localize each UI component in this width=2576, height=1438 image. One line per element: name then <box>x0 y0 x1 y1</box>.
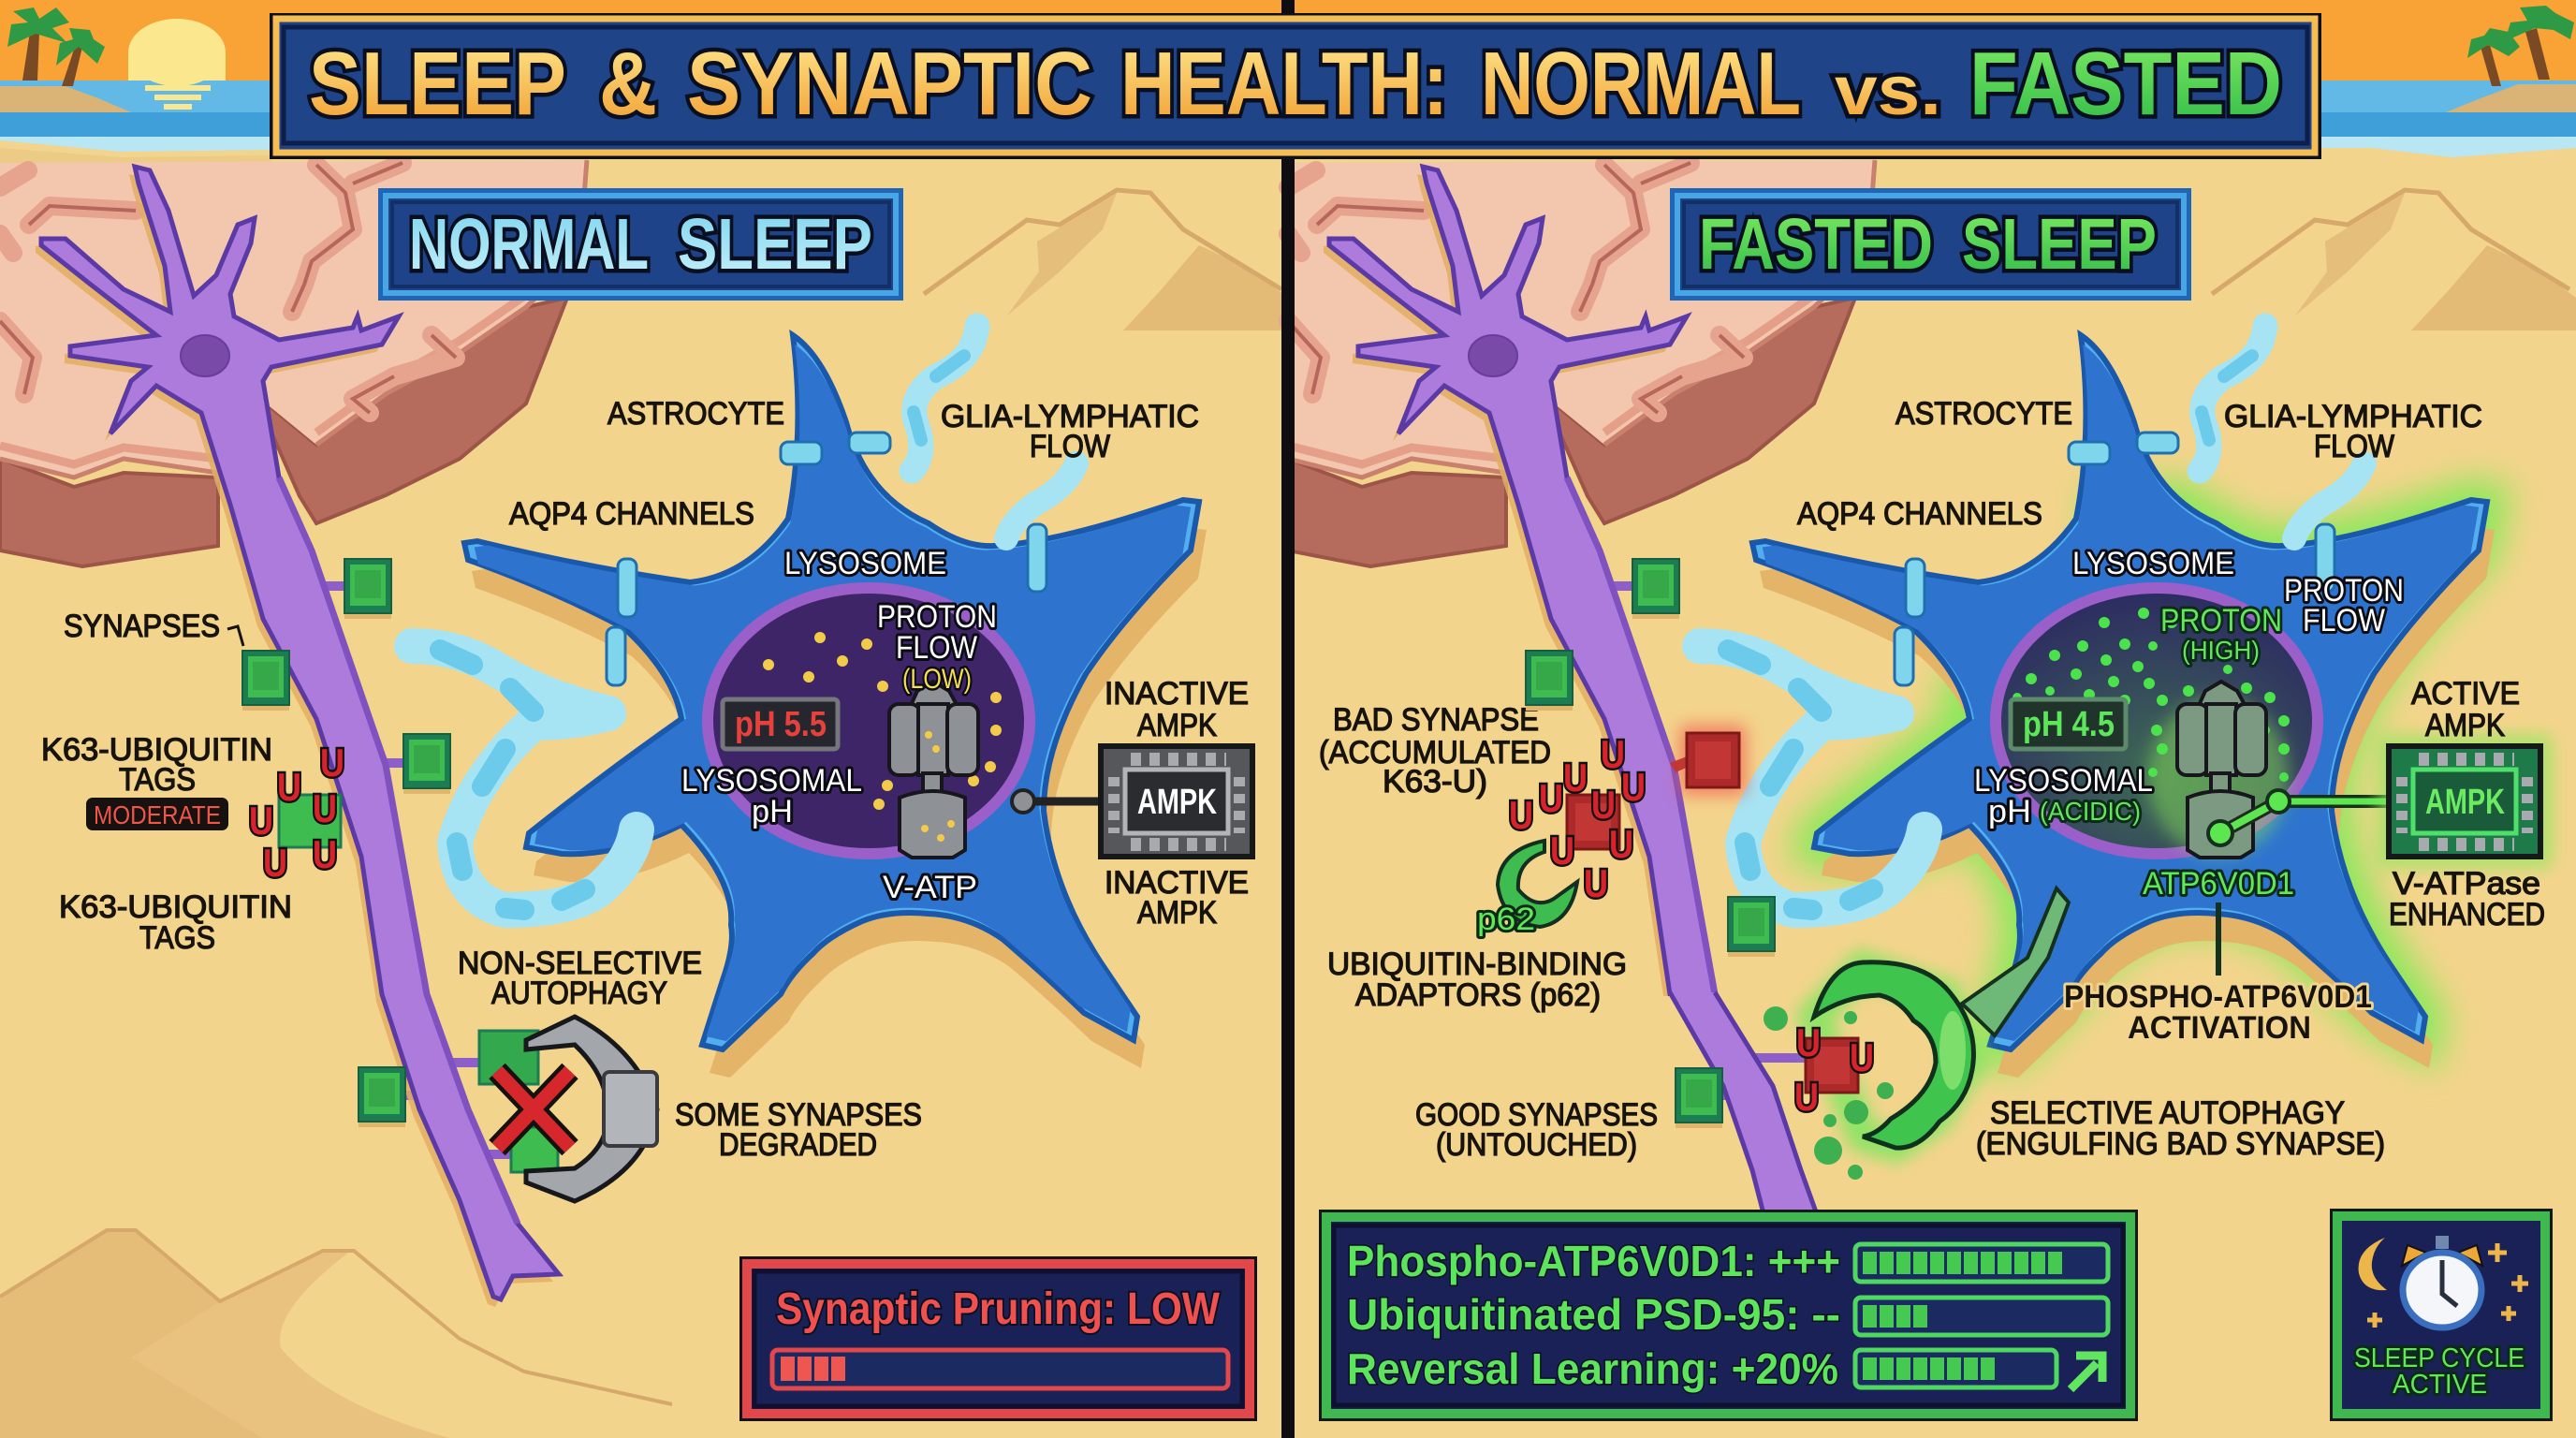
label: some synapses degraded: SOME SYNAPSES <box>675 1097 922 1133</box>
title text: NORMAL <box>1481 34 1801 134</box>
dunes: right panel top right <box>2212 190 2576 330</box>
title text: HEALTH: <box>1120 34 1448 134</box>
synapses: left panel healthy <box>242 559 450 1127</box>
label: selective autophagy <box>1976 1095 2385 1162</box>
dunes: left panel bottom <box>0 1230 672 1438</box>
title text <box>309 34 2282 134</box>
red synapse with accumulated U tags: U <box>1563 756 1588 800</box>
label: lysosome, right: LYSOSOME <box>2072 546 2234 581</box>
p62 adaptor: p62 <box>1477 902 1535 937</box>
label: non-selective autophagy: NON-SELECTIVE <box>458 946 702 981</box>
V-ATPase pump with phospho activation: right <box>2177 682 2278 858</box>
label: K63 ubiquitin tags upper <box>41 732 272 798</box>
label: inactive AMPK upper: INACTIVE <box>1105 676 1249 712</box>
label: phospho-ATP6V0D1 activation: PHOSPHO-ATP6V0D1 <box>2064 979 2372 1015</box>
label: proton high: (HIGH) <box>2182 636 2260 665</box>
label: sleep cycle active: ACTIVE <box>2393 1370 2487 1400</box>
tagged synapse with U tags: U <box>277 765 301 809</box>
astrocyte: left <box>464 335 1207 1078</box>
label: K63 ubiquitin tags lower: TAGS <box>139 920 215 956</box>
tagged synapse with U tags: U <box>249 799 273 843</box>
icon: crescent moon <box>2359 1238 2387 1290</box>
label: proton flow low: FLOW <box>896 630 977 666</box>
label: inactive AMPK upper: AMPK <box>1137 708 1217 743</box>
right island with palms <box>2446 6 2576 112</box>
red synapse with accumulated U tags: U <box>1609 822 1633 866</box>
V-ATPase pump: left <box>889 682 978 858</box>
label: ubiquitin-binding adaptors: ADAPTORS (p62) <box>1355 977 1601 1013</box>
label: K63 ubiquitin tags lower <box>59 889 292 956</box>
label: non-selective autophagy <box>458 946 702 1011</box>
label: K63 ubiquitin tags upper: TAGS <box>119 762 196 798</box>
brain cross-section: right <box>1288 160 1875 566</box>
label: active AMPK <box>2411 676 2520 743</box>
title text: SYNAPTIC <box>687 34 1092 134</box>
neuron with axon: left <box>36 167 559 1307</box>
AQP4 channels: left <box>607 433 1046 685</box>
neuron with axon: right <box>1324 163 1818 1210</box>
arrow: improvement <box>2071 1356 2102 1389</box>
label: proton flow low: PROTON <box>877 599 997 635</box>
label: lysosomal pH acidic <box>1974 763 2153 829</box>
label: V-ATPase enhanced <box>2389 866 2545 932</box>
label: ubiquitin-binding adaptors: UBIQUITIN-BINDING <box>1327 946 1627 982</box>
heading: fasted sleep: SLEEP <box>1962 204 2157 285</box>
label: ATP6V0D1: ATP6V0D1 <box>2143 866 2294 902</box>
tagged synapse with U tags: U <box>320 741 344 785</box>
red synapse with accumulated U tags: U <box>1591 783 1616 827</box>
selective autophagosome engulfing bad synapse <box>1764 888 2069 1180</box>
label: V-ATPase enhanced: V-ATPase <box>2393 866 2540 902</box>
heading: normal sleep <box>378 188 903 301</box>
red synapse with accumulated U tags: U <box>1601 732 1625 776</box>
label: inactive AMPK upper <box>1105 676 1249 743</box>
stat: ubiquitinated PSD-95: Ubiquitinated PSD-95: -- <box>1347 1290 1840 1339</box>
selective autophagosome engulfing bad synapse: U <box>1794 1075 1819 1119</box>
label: good synapses: (UNTOUCHED) <box>1436 1127 1637 1163</box>
label: active AMPK: ACTIVE <box>2411 676 2520 712</box>
label: glia-lymphatic flow, right: GLIA-LYMPHATIC <box>2224 399 2482 434</box>
glia-lymphatic flow: right <box>1700 326 2364 910</box>
stat: reversal learning: Reversal Learning: +20% <box>1347 1344 1838 1393</box>
panel: sleep cycle active <box>2330 1209 2553 1421</box>
heading: fasted sleep: FASTED <box>1699 204 1933 285</box>
label: lysosomal pH acidic: LYSOSOMAL <box>1974 763 2153 799</box>
label: lysosome, left: LYSOSOME <box>784 546 946 581</box>
title banner <box>270 13 2321 159</box>
green glow around astrocyte: right <box>1752 335 2487 1049</box>
red synapse with accumulated U tags: U <box>1509 793 1533 837</box>
icon: alarm clock <box>2402 1236 2482 1328</box>
label: K63 ubiquitin tags upper: K63-UBIQUITIN <box>41 732 272 768</box>
label: lysosomal pH acidic: (ACIDIC) <box>2040 797 2141 826</box>
stat: phospho-ATP6V0D1: Phospho-ATP6V0D1: +++ <box>1347 1237 1840 1285</box>
label: lysosomal pH: LYSOSOMAL <box>681 763 862 799</box>
label: astrocyte, left: ASTROCYTE <box>607 396 784 432</box>
heading: fasted sleep <box>1670 188 2191 301</box>
label: lysosomal pH <box>681 763 862 829</box>
astrocyte: right <box>1752 335 2495 1078</box>
phospho pointer line <box>2216 902 2221 976</box>
tagged synapse with U tags: U <box>263 841 287 885</box>
label: proton flow outer <box>2284 573 2404 638</box>
label: proton flow outer: FLOW <box>2303 603 2385 638</box>
label: bad synapse: (ACCUMULATED <box>1319 735 1551 770</box>
badge: moderate: MODERATE <box>94 800 221 829</box>
sun <box>128 19 226 107</box>
label: AQP4 channels, right: AQP4 CHANNELS <box>1797 496 2042 532</box>
AQP4 channels: right <box>1895 433 2334 685</box>
label: sleep cycle active: SLEEP CYCLE <box>2354 1343 2525 1373</box>
label: inactive AMPK lower: AMPK <box>1137 895 1217 931</box>
badge: pH 4.5 <box>2011 699 2126 749</box>
brain cross-section: left <box>0 160 587 566</box>
panel: synaptic pruning status: Synaptic Pruning: LOW <box>776 1284 1221 1334</box>
synapses: right panel healthy <box>1526 559 1775 1128</box>
icon: sparkles <box>2367 1243 2528 1328</box>
label: inactive AMPK lower: INACTIVE <box>1105 865 1249 901</box>
title text: SLEEP <box>309 34 566 134</box>
label: some synapses degraded: DEGRADED <box>719 1127 877 1163</box>
badge: pH 5.5: pH 5.5 <box>735 705 827 744</box>
label: phospho-ATP6V0D1 activation: ACTIVATION <box>2128 1010 2311 1046</box>
label: active AMPK: AMPK <box>2425 708 2505 743</box>
active AMPK chip with connector: AMPK <box>2425 783 2505 822</box>
label: glia-lymphatic flow, right: FLOW <box>2314 429 2394 464</box>
center divider <box>1281 0 1295 1438</box>
label: bad synapse: K63-U) <box>1383 764 1487 800</box>
lysosome: left <box>708 588 1030 854</box>
tagged synapse with U tags <box>249 741 344 885</box>
label: glia-lymphatic flow, left: FLOW <box>1030 429 1110 464</box>
label: proton high <box>2160 603 2282 665</box>
label: synapses with hook: SYNAPSES <box>64 609 220 644</box>
title text: FASTED <box>1969 34 2282 134</box>
label: selective autophagy: (ENGULFING BAD SYNAPSE) <box>1976 1126 2385 1162</box>
title text: & <box>599 34 657 134</box>
p62 adaptor <box>1477 841 1577 937</box>
label: proton flow low: (LOW) <box>902 664 972 695</box>
label: glia-lymphatic flow, left <box>941 399 1199 464</box>
red synapse with accumulated U tags: U <box>1539 776 1563 820</box>
left island with palms <box>0 7 131 112</box>
heading: normal sleep: SLEEP <box>678 204 872 285</box>
red synapse with accumulated U tags: U <box>1584 861 1608 905</box>
red synapse with accumulated U tags: U <box>1621 765 1646 809</box>
badge: pH 5.5 <box>723 699 838 749</box>
label: bad synapse <box>1319 702 1551 800</box>
label: good synapses <box>1415 1097 1658 1163</box>
label: bad synapse: BAD SYNAPSE <box>1333 702 1539 738</box>
label: phospho-ATP6V0D1 activation <box>2064 979 2372 1046</box>
panel: biomarker stats <box>1319 1210 2138 1421</box>
tagged synapse with U tags: U <box>313 832 337 876</box>
label: V-ATP: V-ATP <box>883 870 977 905</box>
label: selective autophagy: SELECTIVE AUTOPHAGY <box>1990 1095 2345 1131</box>
label: non-selective autophagy: AUTOPHAGY <box>491 976 667 1011</box>
non-selective autophagosome with degraded synapses <box>479 1017 657 1201</box>
label: some synapses degraded <box>675 1097 922 1163</box>
label: K63 ubiquitin tags lower: K63-UBIQUITIN <box>59 889 292 925</box>
stat: phospho-ATP6V0D1 <box>1347 1237 2108 1285</box>
label: glia-lymphatic flow, left: GLIA-LYMPHATIC <box>941 399 1199 434</box>
red synapse with accumulated U tags: U <box>1550 829 1574 873</box>
glia-lymphatic flow: left <box>412 326 1076 910</box>
stat: ubiquitinated PSD-95 <box>1347 1290 2108 1339</box>
label: ubiquitin-binding adaptors <box>1327 946 1627 1013</box>
lysosome: right <box>1996 588 2318 857</box>
title text: vs. <box>1835 51 1941 129</box>
active AMPK chip with connector <box>2267 735 2552 868</box>
heading: normal sleep: NORMAL <box>409 204 649 285</box>
label: good synapses: GOOD SYNAPSES <box>1415 1097 1658 1133</box>
label: AQP4 channels, left: AQP4 CHANNELS <box>509 496 754 532</box>
badge: pH 4.5: pH 4.5 <box>2023 705 2115 744</box>
selective autophagosome engulfing bad synapse: U <box>1796 1020 1821 1064</box>
glowing bad synapse <box>1670 726 1746 795</box>
inactive AMPK chip with connector <box>1012 746 1252 857</box>
label: astrocyte, right: ASTROCYTE <box>1895 396 2072 432</box>
label: glia-lymphatic flow, right <box>2224 399 2482 464</box>
tagged synapse with U tags: U <box>313 786 337 830</box>
beach scene: sky and sea <box>0 0 2576 165</box>
red synapse with accumulated U tags <box>1509 732 1646 905</box>
label: inactive AMPK lower <box>1105 865 1249 931</box>
label: V-ATPase enhanced: ENHANCED <box>2389 897 2545 932</box>
dunes: left panel top right <box>924 190 1288 330</box>
label: proton high: PROTON <box>2160 603 2282 638</box>
label: sleep cycle active <box>2354 1343 2525 1400</box>
label: lysosomal pH acidic: pH <box>1988 794 2031 829</box>
selective autophagosome engulfing bad synapse: U <box>1850 1035 1874 1079</box>
inactive AMPK chip with connector: AMPK <box>1137 783 1217 822</box>
label: proton flow low <box>877 599 997 695</box>
panel: synaptic pruning status <box>739 1256 1257 1421</box>
label: lysosomal pH: pH <box>752 794 793 829</box>
label: proton flow outer: PROTON <box>2284 573 2404 609</box>
